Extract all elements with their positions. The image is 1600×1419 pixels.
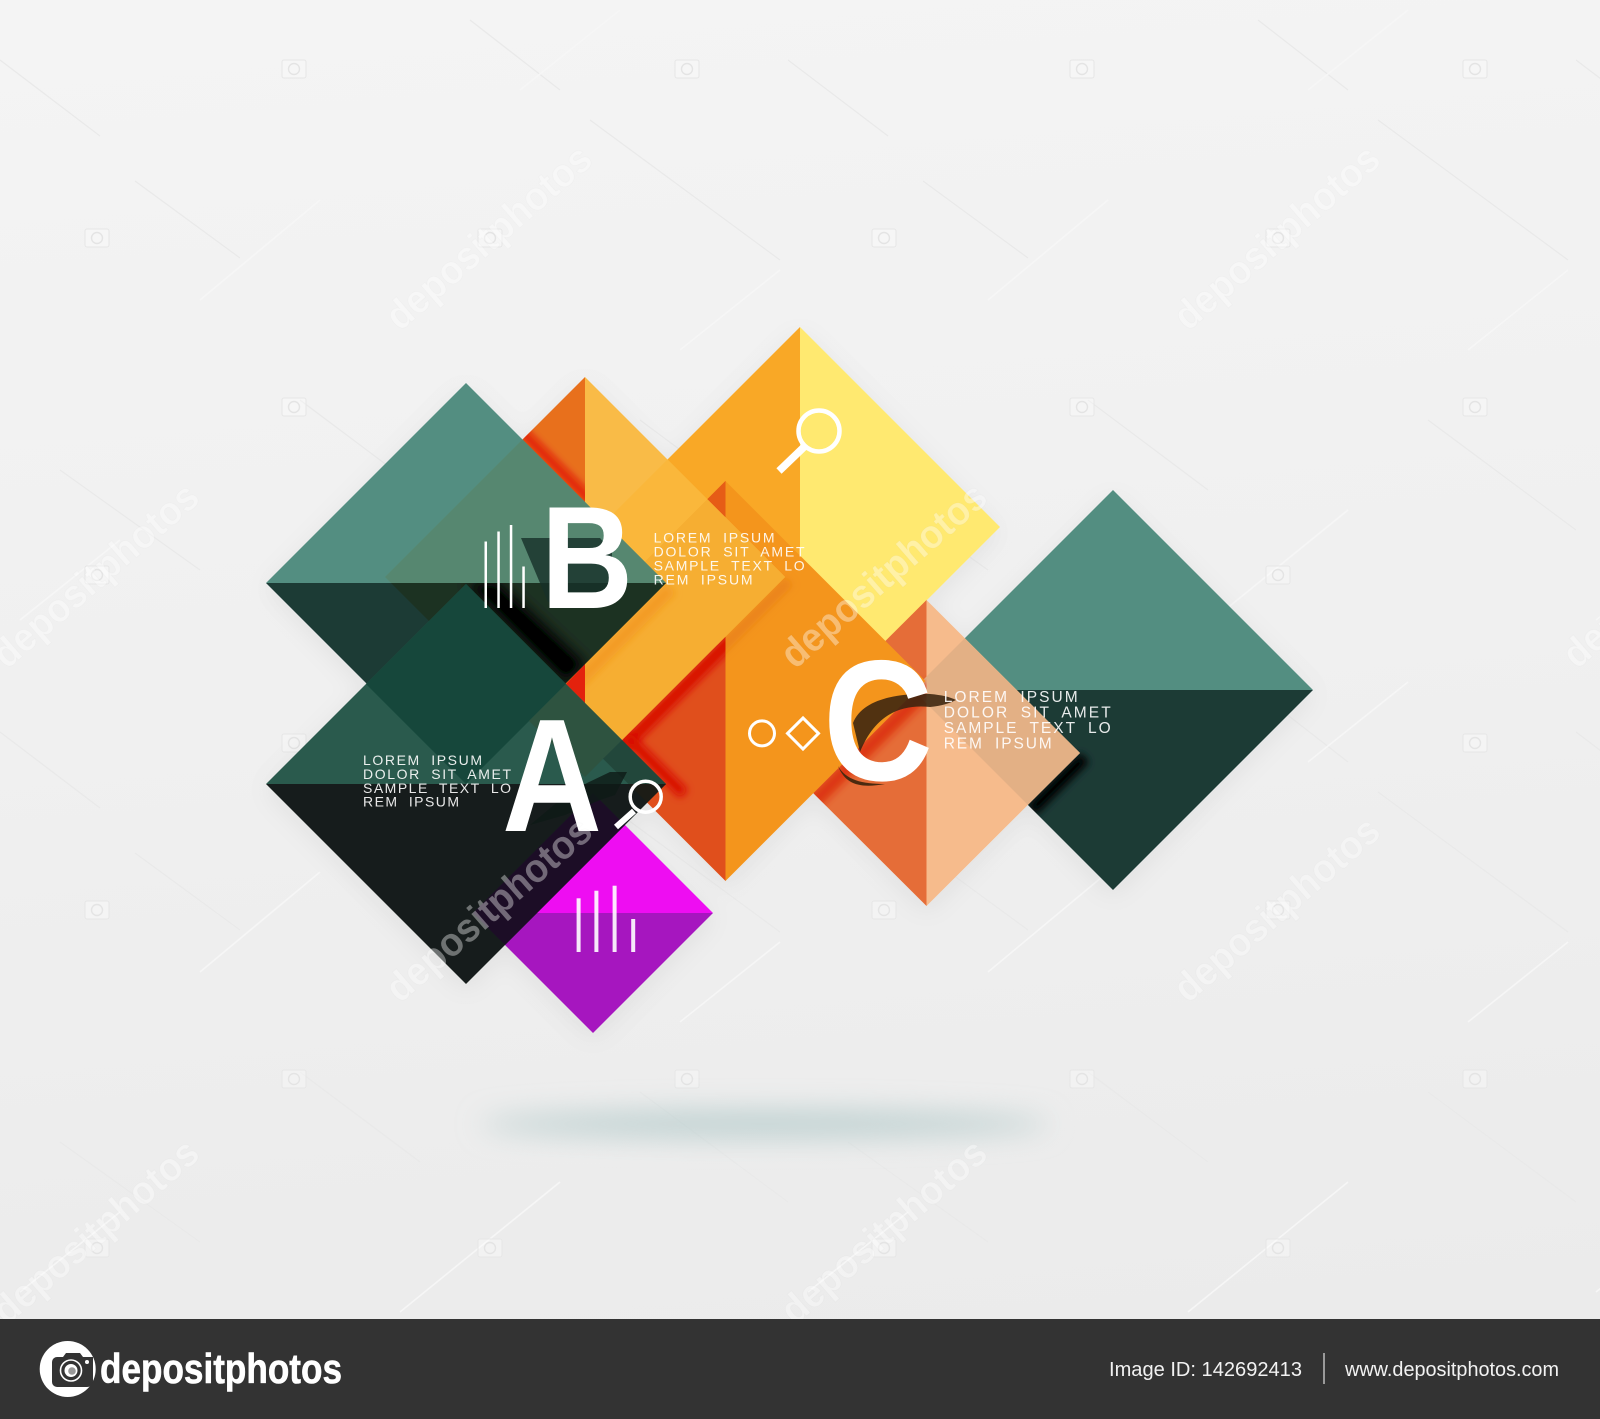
letter shadow: A xyxy=(530,772,627,825)
watermark text: depositphotos xyxy=(377,136,601,339)
watermark text: depositphotos xyxy=(1165,808,1389,1011)
watermark text: depositphotos xyxy=(772,474,996,677)
panel: B green diamond xyxy=(266,383,666,684)
icon: bars in B diamond xyxy=(484,525,525,608)
text block: C: LOREM IPSUM xyxy=(944,689,1078,706)
icon: magnifier on A diamond xyxy=(616,781,661,827)
panel: tall orange diamond xyxy=(622,481,926,881)
letter shadow: C xyxy=(838,694,956,786)
letter shadow: B xyxy=(521,538,612,602)
panel: light orange diamond xyxy=(522,377,785,740)
text block: C xyxy=(944,689,1111,752)
footer divider xyxy=(1323,1353,1325,1384)
panel: right green diamond xyxy=(913,490,1313,890)
watermark text: depositphotos xyxy=(377,808,601,1011)
panel: yellow diamond xyxy=(600,327,1000,727)
icon: bars in purple diamond xyxy=(577,886,635,952)
text block: A: DOLOR SIT AMET xyxy=(363,766,511,782)
watermark text: depositphotos xyxy=(1165,136,1389,339)
footer logo icon xyxy=(40,1341,96,1397)
footer logo text: depositphotos xyxy=(100,1345,342,1392)
footer bar xyxy=(0,1319,1600,1419)
letter B: B xyxy=(541,476,633,639)
letter C: C xyxy=(823,625,933,817)
text block: A: LOREM IPSUM xyxy=(363,752,482,768)
panel: peach C diamond xyxy=(813,600,1080,906)
panel: purple diamond xyxy=(473,793,713,1033)
diamond cluster xyxy=(266,327,1313,1033)
footer image id: Image ID: 142692413 xyxy=(1109,1359,1302,1381)
panel: A green diamond xyxy=(266,584,666,984)
text block: A: REM IPSUM xyxy=(363,794,459,810)
floor shadow xyxy=(480,1111,1050,1137)
footer url: www.depositphotos.com xyxy=(1344,1359,1559,1381)
watermark text: depositphotos xyxy=(772,1130,996,1333)
text block: C: REM IPSUM xyxy=(944,736,1052,752)
text block: B: DOLOR SIT AMET xyxy=(654,544,805,560)
text block: B: REM IPSUM xyxy=(654,572,753,588)
text block: B: SAMPLE TEXT LO xyxy=(654,558,805,574)
text block: A xyxy=(363,752,511,810)
text block: B: LOREM IPSUM xyxy=(654,530,775,546)
text block: B xyxy=(654,530,805,588)
small camera watermarks xyxy=(85,60,1487,1257)
text block: A: SAMPLE TEXT LO xyxy=(363,780,511,796)
icon: magnifier on yellow diamond xyxy=(779,410,840,471)
letter A: A xyxy=(502,686,602,866)
text block: C: DOLOR SIT AMET xyxy=(944,704,1111,722)
icon: circle and diamond xyxy=(750,718,818,749)
text block: C: SAMPLE TEXT LO xyxy=(944,720,1111,737)
